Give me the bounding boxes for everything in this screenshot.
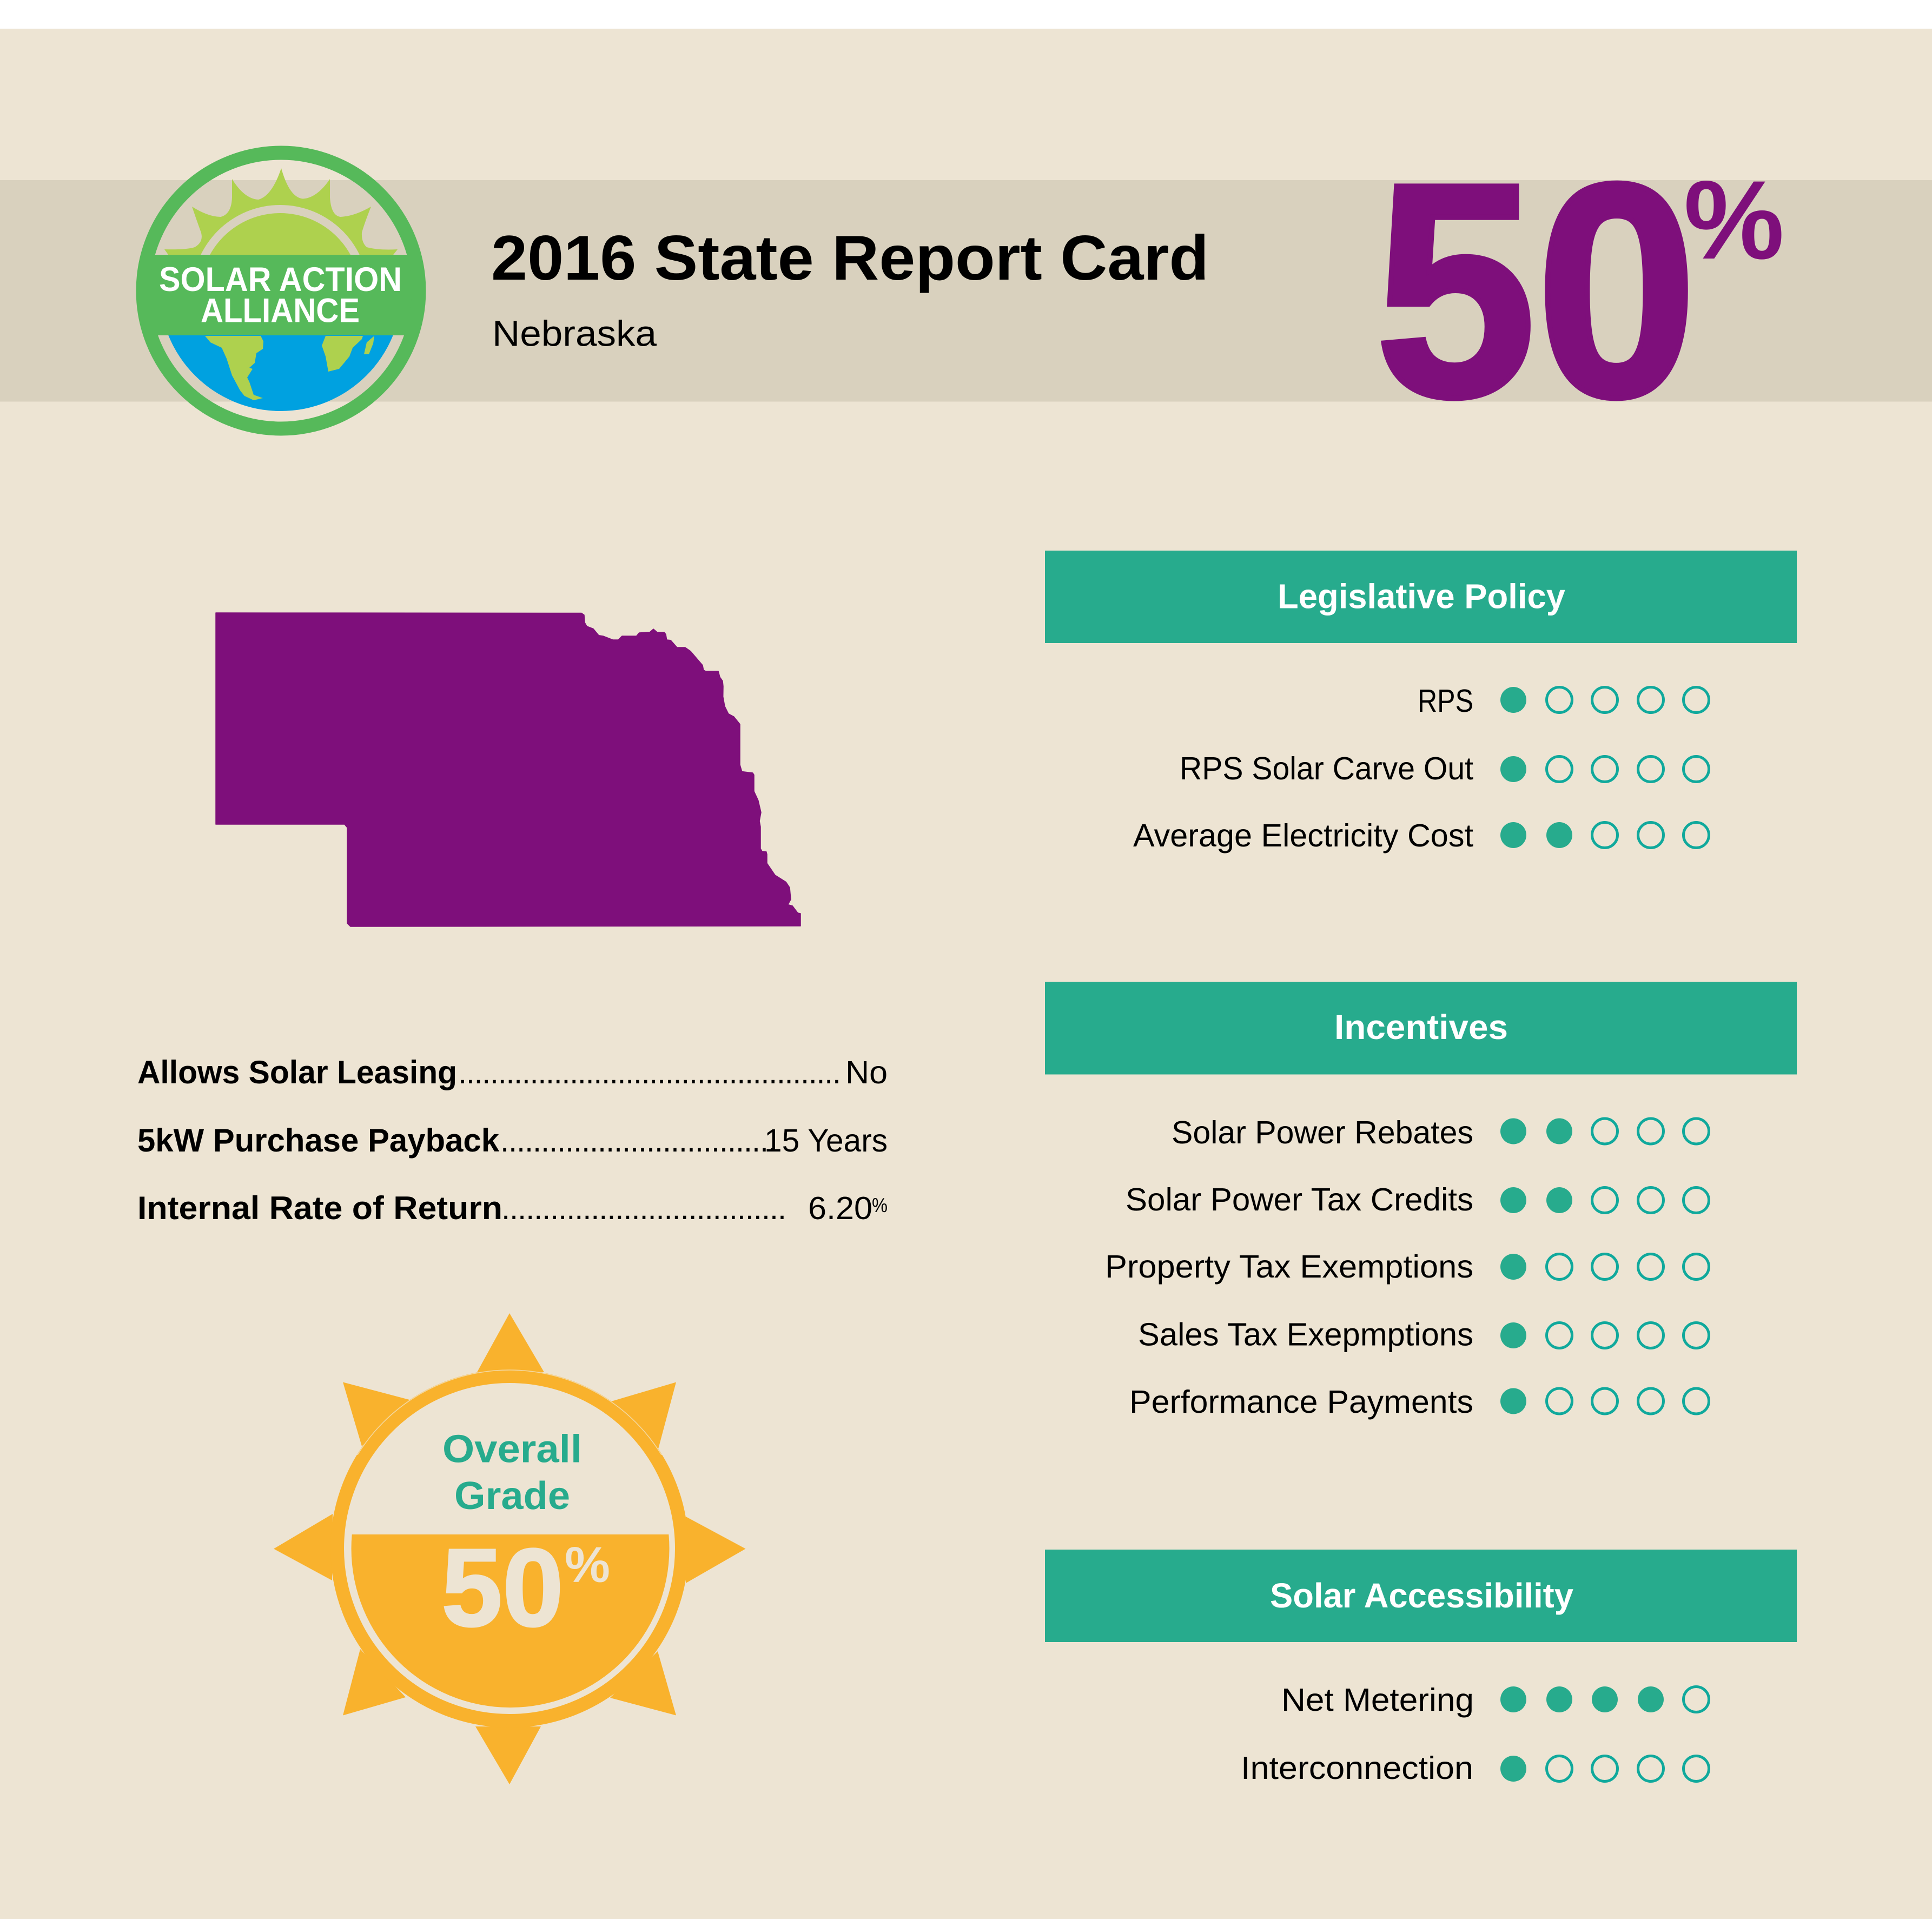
stat: 5kW purchase payback: 5kW Purchase Payback [137, 1122, 500, 1159]
row: RPS solar carve out: RPS Solar Carve Out [1180, 751, 1473, 786]
row: net metering: Net Metering [1281, 1682, 1474, 1718]
badge lower half [352, 1534, 670, 1708]
badge score: % [565, 1537, 610, 1593]
badge heading: Overall [442, 1428, 582, 1471]
heading text: Solar Accessibility [1270, 1576, 1573, 1615]
stat: 5kW purchase payback: 15 Years [764, 1123, 888, 1159]
panel: legislative policy [1045, 551, 1797, 853]
row: solar power rebates [1172, 1115, 1709, 1150]
stat: internal rate of return [137, 1190, 888, 1226]
logo wordmark: SOLAR ACTION [159, 261, 402, 299]
stat: allows solar leasing [137, 1054, 888, 1090]
row: average electricity cost: Average Electricity Cost [1133, 818, 1473, 853]
logo sun [164, 168, 398, 255]
heading bar [1045, 551, 1797, 643]
row: property tax exemptions: Property Tax Exemptions [1105, 1249, 1473, 1285]
badge ring [338, 1376, 682, 1721]
headline score 50%: % [1684, 157, 1784, 282]
row: sales tax exepmptions [1138, 1316, 1709, 1352]
badge heading [442, 1428, 582, 1518]
panel: solar accessibility [1045, 1550, 1797, 1786]
stat: allows solar leasing: Allows Solar Leasing [137, 1054, 457, 1090]
heading text: Legislative Policy [1278, 577, 1565, 616]
row: net metering [1281, 1682, 1709, 1718]
row: performance payments [1129, 1384, 1709, 1420]
stat: internal rate of return: % [872, 1194, 888, 1216]
row: interconnection: Interconnection [1241, 1750, 1473, 1786]
row: property tax exemptions [1105, 1249, 1709, 1285]
row: RPS solar carve out [1180, 751, 1709, 786]
badge heading: Grade [454, 1474, 570, 1518]
row: RPS [1418, 683, 1709, 719]
overall grade sun badge [274, 1313, 745, 1784]
stat: internal rate of return: Internal Rate of Return [137, 1190, 502, 1226]
heading text: Incentives [1334, 1008, 1508, 1047]
stat: internal rate of return: 6.20 [808, 1190, 872, 1226]
logo: Solar Action Alliance [135, 153, 427, 428]
logo wordmark [159, 261, 402, 330]
row: RPS: RPS [1418, 683, 1473, 719]
subtitle: state name: Nebraska [492, 314, 657, 354]
sun rays [274, 1313, 745, 1784]
row: solar power rebates: Solar Power Rebates [1172, 1115, 1473, 1150]
logo ring [143, 153, 419, 428]
header band [0, 180, 1932, 401]
panel: incentives [1045, 982, 1797, 1420]
map: Nebraska [216, 613, 800, 927]
stats list [137, 1054, 888, 1226]
row: interconnection [1241, 1750, 1709, 1786]
logo wordmark: ALLIANCE [201, 292, 360, 330]
stat: internal rate of return: ................................... [501, 1191, 786, 1226]
heading bar [1045, 982, 1797, 1074]
stat: allows solar leasing: ................................................ [458, 1055, 841, 1090]
row: solar power tax credits [1126, 1182, 1709, 1217]
headline score 50%: 50 [1375, 121, 1697, 460]
row: performance payments: Performance Payments [1129, 1384, 1473, 1420]
row: sales tax exepmptions: Sales Tax Exepmptions [1138, 1316, 1473, 1352]
badge score: 50 [441, 1526, 564, 1650]
row: average electricity cost [1133, 818, 1709, 853]
title: 2016 State Report Card [491, 222, 1209, 293]
logo globe [168, 335, 393, 411]
stat: 5kW purchase payback: .................................. [500, 1123, 777, 1159]
heading bar [1045, 1550, 1797, 1642]
stat: allows solar leasing: No [845, 1055, 888, 1090]
logo banner [150, 255, 412, 335]
stat: 5kW purchase payback [137, 1122, 888, 1159]
row: solar power tax credits: Solar Power Tax Credits [1126, 1182, 1473, 1217]
